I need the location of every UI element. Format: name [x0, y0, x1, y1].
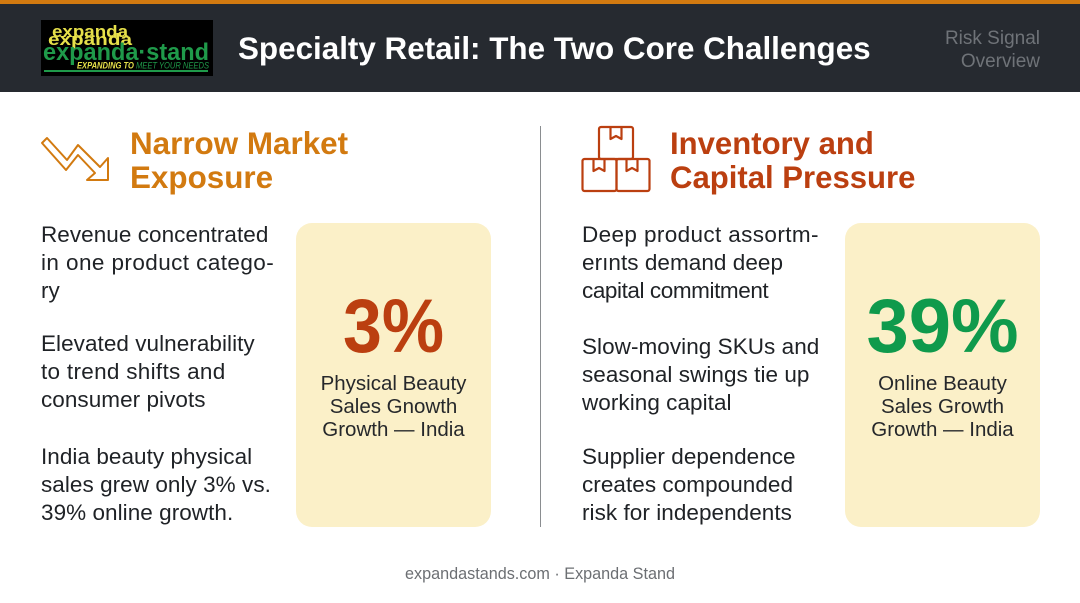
point 1: erınts demand deep [582, 250, 783, 275]
title: Specialty Retail: The Two Core Challenges [238, 31, 871, 66]
stat value: 3% [343, 284, 444, 369]
point 2: seasonal swings tie up [582, 362, 809, 387]
point 1: Revenue concentrated [41, 222, 268, 247]
point 3: risk for independents [582, 500, 792, 525]
logo [41, 20, 213, 76]
point 1: ry [41, 278, 60, 303]
point 1: Deep product assortm- [582, 222, 819, 247]
point 3: Supplier dependence [582, 444, 796, 469]
point 1: in one product catego- [41, 250, 274, 275]
point 1 [582, 222, 819, 303]
point 2: consumer pivots [41, 387, 206, 412]
point 3: creates compounded [582, 472, 793, 497]
point 2 [41, 331, 255, 412]
heading: inventory and capital pressure: Inventory and [670, 126, 874, 161]
stat value: 39% [866, 284, 1019, 369]
stat label: Sales Growth [881, 395, 1004, 418]
logo: expanda [48, 30, 133, 49]
heading: inventory and capital pressure [670, 126, 915, 195]
point 2: Slow-moving SKUs and [582, 334, 819, 359]
stat label: Growth — India [871, 418, 1014, 441]
heading: inventory and capital pressure: Capital Pressure [670, 160, 915, 195]
center divider [540, 126, 541, 527]
heading: narrow market exposure: Exposure [130, 160, 273, 195]
header tag: Risk Signal [945, 28, 1040, 49]
heading: narrow market exposure: Narrow Market [130, 126, 348, 161]
point 2: to trend shifts and [41, 359, 226, 384]
footer: expandastands.com · Expanda Stand [405, 565, 675, 583]
stat label: Online Beauty [878, 372, 1007, 395]
point 3: 39% online growth. [41, 500, 233, 525]
header tag [945, 28, 1040, 72]
stat label: Growth — India [322, 418, 465, 441]
stat label [871, 372, 1014, 441]
icon: falling trend arrow [41, 137, 109, 181]
stat card: 3% [296, 223, 491, 527]
icon: stacked boxes [581, 126, 651, 192]
text: narrow market points [41, 222, 274, 525]
point 3: India beauty physical [41, 444, 252, 469]
point 1: capital commitment [582, 278, 768, 303]
header bar [0, 0, 1080, 92]
heading: narrow market exposure [130, 126, 348, 195]
stat label: Physical Beauty [321, 372, 466, 395]
point 3 [41, 444, 271, 525]
point 1 [41, 222, 274, 303]
stat card: 39% [845, 223, 1040, 527]
stat label [321, 372, 466, 441]
logo: expanda·stand [43, 39, 209, 66]
text: inventory points [582, 222, 819, 525]
point 2 [582, 334, 819, 415]
stat label: Sales Gnowth [330, 395, 457, 418]
accent stripe [0, 0, 1080, 4]
point 2: Elevated vulnerability [41, 331, 255, 356]
point 2: working capital [582, 390, 732, 415]
logo: expanda [52, 22, 129, 41]
point 3: sales grew only 3% vs. [41, 472, 271, 497]
header tag: Overview [961, 51, 1040, 72]
point 3 [582, 444, 796, 525]
